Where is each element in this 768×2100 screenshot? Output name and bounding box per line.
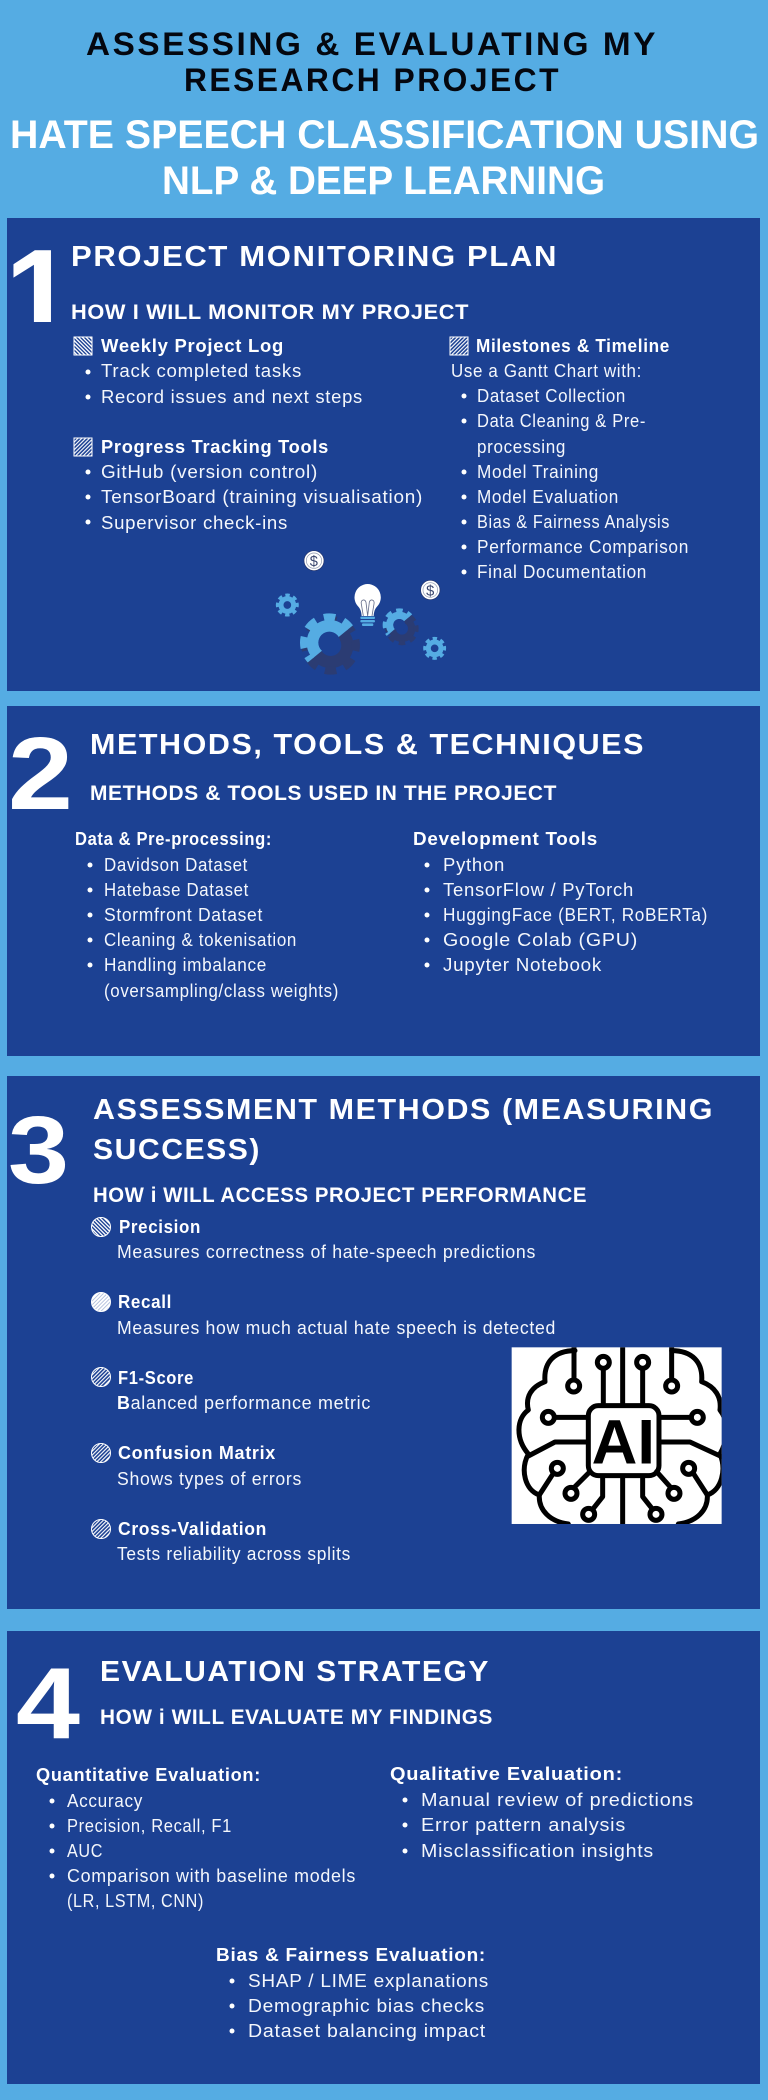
metric: recall: Measures how much actual hate speech is detected (117, 1318, 556, 1338)
metric: precision: Measures correctness of hate-speech predictions (117, 1242, 536, 1262)
block: progress tracking tools: Progress Tracking Tools (101, 437, 329, 457)
number 1: 1 (5, 225, 74, 363)
number 4: 4 (16, 1648, 80, 1760)
block: progress tracking tools (74, 437, 423, 533)
block: data and pre-processing: (oversampling/class weights) (104, 981, 339, 1001)
icon: coin left (304, 551, 324, 571)
block: data and pre-processing (75, 829, 339, 1001)
subtitle: hate speech classification: NLP & DEEP LEARNING (162, 159, 605, 203)
block: qualitative evaluation (390, 1764, 694, 1861)
block: data and pre-processing: Hatebase Dataset (104, 880, 249, 900)
block: bias and fairness evaluation: Dataset balancing impact (248, 2021, 486, 2041)
icon: light bulb (355, 584, 381, 626)
block: milestones and timeline: Data Cleaning & Pre- (477, 411, 646, 431)
block: progress tracking tools: Supervisor check-ins (101, 513, 288, 533)
heading: methods, tools and techniques: METHODS, TOOLS & TECHNIQUES (90, 729, 645, 761)
heading: assessment methods: SUCCESS) (93, 1134, 261, 1166)
icon: large gear (300, 613, 353, 662)
icon: coin right: $ (426, 583, 435, 599)
block: bias and fairness evaluation: SHAP / LIME explanations (248, 1971, 489, 1991)
icon label: AI: AI (592, 1407, 655, 1477)
block: development tools: Development Tools (413, 829, 598, 849)
metric: confusion matrix: Shows types of errors (117, 1469, 302, 1489)
block: milestones and timeline: Model Evaluation (477, 487, 619, 507)
subtitle: hate speech classification: HATE SPEECH CLASSIFICATION USING (10, 113, 759, 157)
panel: evaluation strategy (7, 1631, 760, 2084)
icon: coin left: $ (310, 554, 318, 570)
block: milestones and timeline: Dataset Collection (477, 386, 626, 406)
metric: cross-validation: Cross-Validation (118, 1519, 267, 1539)
icon: large gear shadow (300, 615, 361, 676)
block: quantitative evaluation: Precision, Recall, F1 (67, 1816, 232, 1836)
metric: f1-score: Balanced performance metric (117, 1393, 371, 1413)
title: assessing and evaluating: RESEARCH PROJECT (184, 62, 561, 98)
subtitle: hate speech classification (10, 113, 759, 203)
block: weekly project log (74, 336, 363, 407)
block: quantitative evaluation: Comparison with baseline models (67, 1866, 356, 1886)
number 3: 3 (8, 1097, 69, 1204)
heading: assessment methods: ASSESSMENT METHODS (MEASURING (93, 1094, 714, 1126)
block: qualitative evaluation: Qualitative Evaluation: (390, 1764, 623, 1784)
metric: f1-score: F1-Score (118, 1368, 194, 1388)
panel: methods, tools and techniques (7, 706, 760, 1056)
heading: assessment methods (93, 1094, 714, 1166)
metric: recall: Recall (118, 1292, 172, 1312)
block: milestones and timeline: Use a Gantt Chart with: (451, 361, 642, 381)
icon: medium gear shadow (385, 612, 419, 646)
block: data and pre-processing: Data & Pre-processing: (75, 829, 272, 849)
block: milestones and timeline: Bias & Fairness Analysis (477, 512, 670, 532)
block: bias and fairness evaluation: Demographic bias checks (248, 1996, 485, 2016)
metric: precision (92, 1217, 536, 1262)
block: weekly project log: Weekly Project Log (101, 336, 284, 356)
heading: project monitoring plan: PROJECT MONITORING PLAN (71, 241, 558, 273)
block: milestones and timeline: Milestones & Timeline (476, 336, 670, 356)
block: bias and fairness evaluation (216, 1945, 489, 2041)
block: progress tracking tools: TensorBoard (training visualisation) (101, 487, 423, 507)
title: assessing and evaluating: ASSESSING & EVALUATING MY (86, 26, 658, 62)
block: weekly project log: Track completed tasks (101, 361, 302, 381)
metric: confusion matrix (92, 1443, 302, 1489)
icon: small gear right (423, 636, 447, 660)
metric: cross-validation (92, 1519, 351, 1564)
block: development tools: HuggingFace (BERT, RoBERTa) (443, 905, 708, 925)
block: milestones and timeline: Model Training (477, 462, 599, 482)
metric: recall (92, 1292, 556, 1338)
block: qualitative evaluation: Misclassification insights (421, 1841, 654, 1861)
metric: precision: Precision (119, 1217, 201, 1237)
title: assessing and evaluating (86, 26, 658, 98)
block: development tools (413, 829, 708, 975)
block: development tools: Google Colab (GPU) (443, 930, 638, 950)
block: data and pre-processing: Cleaning & tokenisation (104, 930, 297, 950)
icon: AI brain (512, 1343, 726, 1530)
subheading: how i will evaluate: HOW i WILL EVALUATE MY FINDINGS (100, 1706, 493, 1729)
block: development tools: Python (443, 855, 505, 875)
icon: medium gear (382, 608, 412, 636)
block: milestones and timeline (450, 336, 689, 582)
subheading: how I will monitor: HOW I WILL MONITOR MY PROJECT (71, 301, 469, 324)
block: qualitative evaluation: Error pattern analysis (421, 1815, 626, 1835)
metric: confusion matrix: Confusion Matrix (118, 1443, 276, 1463)
block: qualitative evaluation: Manual review of predictions (421, 1790, 694, 1810)
number 2: 2 (8, 716, 73, 831)
icon: small gear left (275, 593, 299, 617)
block: weekly project log: Record issues and next steps (101, 387, 363, 407)
block: milestones and timeline: Performance Comparison (477, 537, 689, 557)
block: milestones and timeline: processing (477, 437, 566, 457)
block: progress tracking tools: GitHub (version control) (101, 462, 318, 482)
panel: project monitoring plan (5, 218, 760, 691)
block: quantitative evaluation (36, 1765, 356, 1911)
panel: assessment methods (7, 1076, 760, 1609)
block: quantitative evaluation: AUC (67, 1841, 103, 1861)
block: data and pre-processing: Davidson Dataset (104, 855, 248, 875)
block: development tools: TensorFlow / PyTorch (443, 880, 634, 900)
block: data and pre-processing: Stormfront Dataset (104, 905, 263, 925)
block: development tools: Jupyter Notebook (443, 955, 602, 975)
subheading: methods and tools used: METHODS & TOOLS USED IN THE PROJECT (90, 782, 557, 805)
metric: f1-score (92, 1368, 371, 1413)
block: milestones and timeline: Final Documentation (477, 562, 647, 582)
block: bias and fairness evaluation: Bias & Fairness Evaluation: (216, 1945, 486, 1965)
block: data and pre-processing: Handling imbalance (104, 955, 267, 975)
icon: coin right (421, 580, 440, 600)
block: quantitative evaluation: (LR, LSTM, CNN) (67, 1891, 204, 1911)
block: quantitative evaluation: Quantitative Evaluation: (36, 1765, 261, 1785)
metric: cross-validation: Tests reliability across splits (117, 1544, 351, 1564)
subheading: how i will access: HOW i WILL ACCESS PROJECT PERFORMANCE (93, 1184, 587, 1207)
block: quantitative evaluation: Accuracy (67, 1791, 143, 1811)
heading: evaluation strategy: EVALUATION STRATEGY (100, 1656, 490, 1688)
illustration: gears, light bulb and coins (275, 551, 447, 676)
